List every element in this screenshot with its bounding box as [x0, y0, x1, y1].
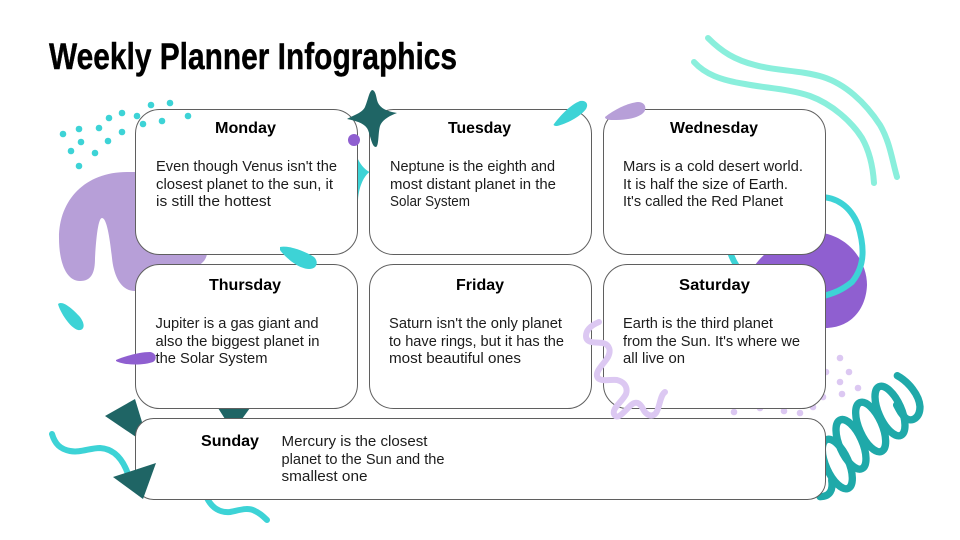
- panel: Wednesday: It's called the Red Planet: [623, 194, 783, 210]
- decoration: mint waves: [694, 38, 897, 183]
- panel: Thursday: also the biggest planet in: [156, 334, 320, 350]
- panel: Friday: Saturn isn't the only planet: [389, 316, 562, 332]
- panel: Tuesday: [370, 110, 592, 254]
- panel: Tuesday: Tuesday: [448, 120, 511, 137]
- panel: Saturday: from the Sun. It's where we: [623, 334, 800, 350]
- panel: Monday: closest planet to the sun, it: [156, 177, 333, 193]
- decoration: teal triangle behind: [218, 408, 250, 419]
- panel: Sunday: Sunday: [201, 433, 259, 450]
- decoration: purple drop: [116, 352, 156, 364]
- panel: Sunday: Mercury is the closest: [282, 434, 428, 450]
- panel: Saturday: [604, 264, 826, 408]
- panel: Saturday: Earth is the third planet: [623, 316, 773, 332]
- decoration: cyan loop end: [730, 252, 738, 268]
- decoration: purple blob: [755, 233, 867, 328]
- panel: Thursday: the Solar System: [156, 351, 268, 367]
- decoration: purple dot: [348, 134, 360, 146]
- panel: Wednesday: It is half the size of Earth.: [623, 177, 788, 193]
- panel: Saturday: Saturday: [679, 277, 750, 294]
- panel: Monday: [136, 110, 358, 254]
- decoration: teal spring: [816, 376, 920, 497]
- decoration: cyan dots: [60, 100, 191, 169]
- panel: Thursday: Thursday: [209, 277, 281, 294]
- panel: Saturday: all live on: [623, 351, 685, 367]
- panel: Friday: to have rings, but it has the: [389, 334, 564, 350]
- panel: Sunday: planet to the Sun and the: [282, 452, 444, 468]
- panel: Thursday: [136, 264, 358, 408]
- title: Weekly Planner Infographics: [49, 36, 457, 77]
- panel: Wednesday: [604, 110, 826, 254]
- decoration: cyan wave lower: [207, 498, 267, 520]
- panel: Thursday: Jupiter is a gas giant and: [156, 316, 318, 332]
- panel: Tuesday: most distant planet in the: [390, 177, 556, 193]
- panel: Sunday: [136, 418, 826, 500]
- decoration: lilac drop Wednesday: [605, 102, 645, 120]
- decoration: cyan drop Monday: [280, 247, 317, 269]
- decoration: cyan wave: [52, 434, 128, 474]
- decoration: lilac dots: [731, 355, 861, 416]
- decoration: cyan star: [352, 157, 370, 200]
- panel: Friday: [370, 264, 592, 408]
- panel: Sunday: smallest one: [282, 469, 368, 485]
- decoration: teal four-point star: [347, 90, 397, 147]
- cards: [136, 110, 826, 500]
- panel: Friday: Friday: [456, 277, 504, 294]
- panel: Monday: Monday: [215, 120, 276, 137]
- decoration: cyan drop left: [58, 303, 84, 330]
- panel: Friday: most beautiful ones: [389, 351, 521, 367]
- decoration: teal triangle lower: [113, 463, 156, 499]
- decoration: cyan ring: [820, 197, 863, 297]
- decoration: lilac squiggle: [586, 322, 665, 417]
- panel: Monday: Even though Venus isn't the: [156, 159, 337, 175]
- decoration: cyan drop Tuesday: [554, 101, 587, 126]
- panel: Tuesday: Neptune is the eighth and: [390, 159, 555, 175]
- decoration: lilac blob: [59, 172, 207, 291]
- panel: Wednesday: Wednesday: [670, 120, 758, 137]
- panel: Wednesday: Mars is a cold desert world.: [623, 159, 803, 175]
- decoration: teal triangle upper: [105, 399, 142, 437]
- panel: Monday: is still the hottest: [156, 194, 271, 210]
- panel: Tuesday: Solar System: [390, 194, 470, 210]
